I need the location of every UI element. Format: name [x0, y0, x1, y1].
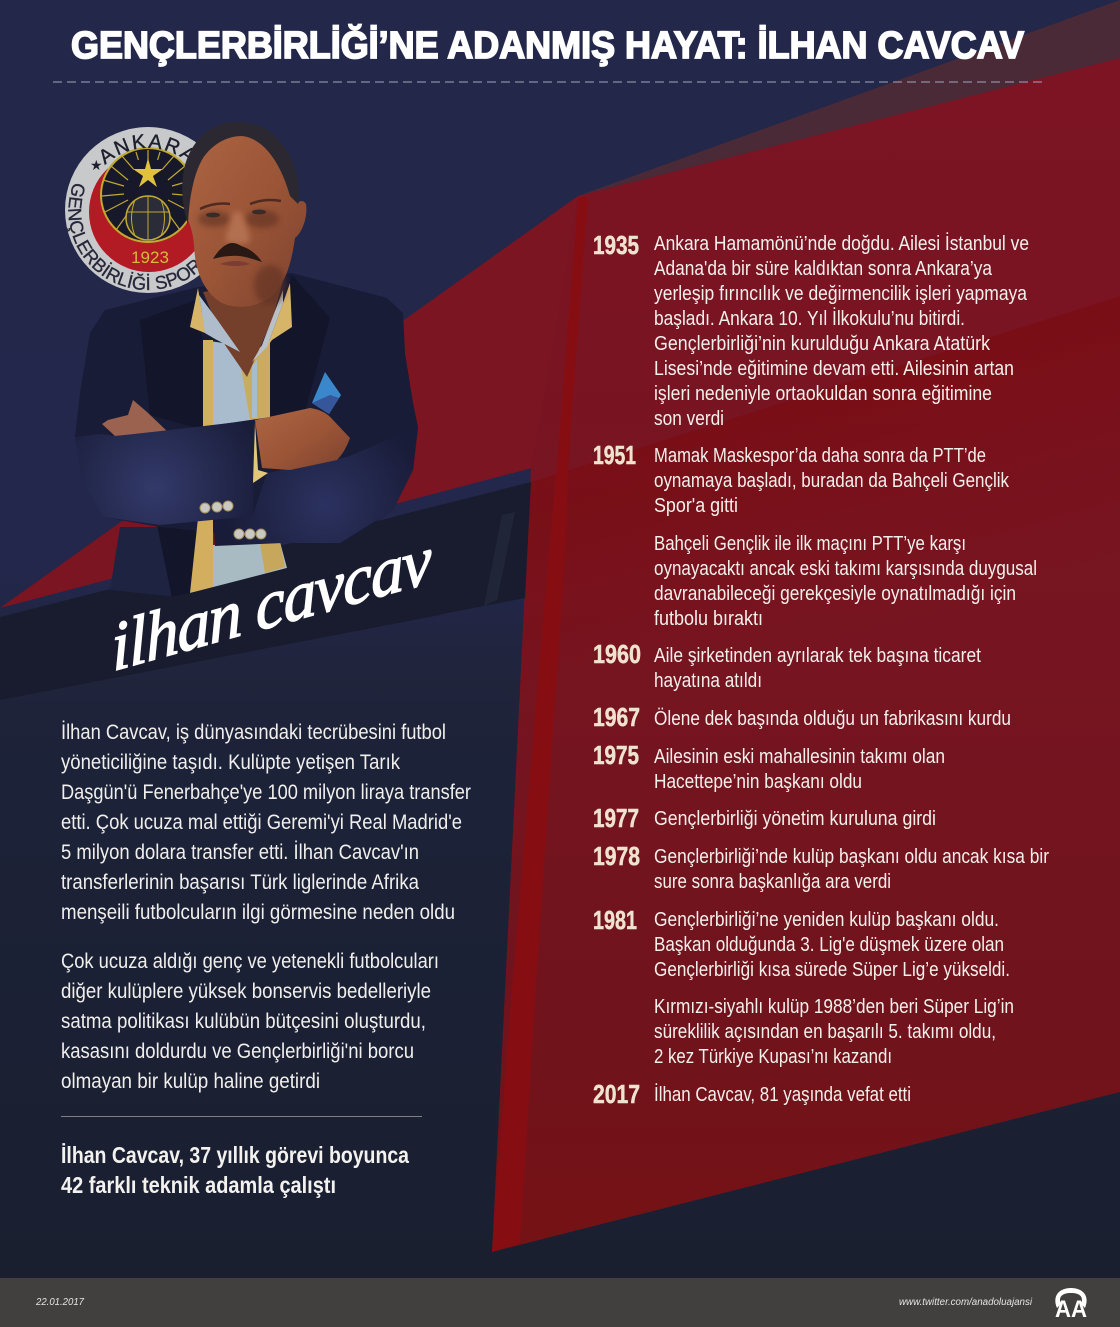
timeline: 1935: yerleşip fırıncılık ve değirmencilik işleri yapmaya: [654, 282, 1028, 305]
club badge: ★: [90, 158, 103, 174]
timeline: 1951: Spor'a gitti: [654, 494, 738, 517]
timeline: 1978: Gençlerbirliği’nde kulüp başkanı oldu ancak kısa bir: [654, 845, 1049, 868]
left text: paragraph 1: etti. Çok ucuza mal ettiği Geremi'yi Real Madrid'e: [61, 810, 462, 834]
timeline: 1960: Aile şirketinden ayrılarak tek başına ticaret: [654, 644, 981, 667]
timeline: 1951: davranabileceği gerekçesiyle oynatılmadığı için: [654, 582, 1016, 605]
timeline: 1951: Bahçeli Gençlik ile ilk maçını PTT’ye karşı: [654, 532, 966, 555]
neck: [203, 280, 283, 377]
left text: paragraph 2: diğer kulüplere yüksek bonservis bedelleriyle: [61, 979, 431, 1003]
portrait: İlhan Cavcav: [75, 122, 418, 598]
red triangle: [0, 196, 578, 608]
left hand: [102, 400, 169, 436]
left text: paragraph 1: menşeili futbolcuların ilgi görmesine neden oldu: [61, 900, 455, 924]
timeline: 1951: futbolu bıraktı: [654, 607, 763, 630]
forearm sleeve: [75, 420, 255, 525]
lips: [220, 261, 250, 266]
left text: paragraph 2: satma politikası kulübün bütçesini oluşturdu,: [61, 1009, 426, 1033]
name band: [0, 482, 531, 700]
title: GENÇLERBİRLİĞİ’NE ADANMIŞ HAYAT: İLHAN CAVCAV: [71, 23, 1025, 67]
timeline: 1981: 1981: [593, 905, 637, 935]
left text: highlight: [61, 1142, 409, 1198]
dashed divider: [53, 81, 1043, 83]
timeline: 2017: [593, 1079, 911, 1109]
timeline: 1935: Lisesi’nde eğitimine devam etti. Ailesinin artan: [654, 357, 1014, 380]
shirt: [203, 340, 270, 427]
club badge: ANKARA: [101, 134, 192, 166]
timeline: 1951: 1951: [593, 440, 636, 470]
main red panel: [492, 58, 1120, 1252]
timeline: 1975: Ailesinin eski mahallesinin takımı olan: [654, 745, 945, 768]
timeline: 1975: 1975: [593, 740, 639, 770]
icon: AA logo: AA: [1055, 1296, 1087, 1323]
lower jacket: [157, 525, 200, 598]
left text: paragraph 2: kasasını doldurdu ve Gençlerbirliği'ni borcu: [61, 1039, 414, 1063]
moustache: [213, 243, 262, 262]
left text: paragraph 1: Daşgün'ü Fenerbahçe'ye 100 milyon liraya transfer: [61, 780, 471, 804]
nose highlight: [226, 212, 250, 244]
shirt collars: [190, 283, 292, 362]
pocket square: [312, 372, 341, 414]
timeline: 1981: Gençlerbirliği kısa sürede Süper Lig’e yükseldi.: [654, 958, 1010, 981]
timeline: 1935: Adana'da bir süre kaldıktan sonra Ankara’ya: [654, 257, 992, 280]
timeline: 1935: işleri nedeniyle ortaokuldan sonra eğitimine: [654, 382, 992, 405]
timeline: 1960: hayatına atıldı: [654, 669, 762, 692]
footer bar: [0, 1278, 1120, 1327]
timeline: 1935: son verdi: [654, 407, 724, 430]
lower body fade: [110, 527, 178, 597]
left text: paragraph 1: [61, 720, 471, 924]
timeline: 1935: Ankara Hamamönü’nde doğdu. Ailesi İstanbul ve: [654, 232, 1029, 255]
club badge: 1923: [131, 248, 169, 267]
buttons upper: [200, 501, 233, 513]
timeline: 1978: 1978: [593, 841, 640, 871]
timeline: 1977: 1977: [593, 803, 639, 833]
timeline: 2017: İlhan Cavcav, 81 yaşında vefat etti: [654, 1083, 911, 1106]
left text: paragraph 1: yöneticiliğine taşıdı. Kulüpte yetişen Tarık: [61, 750, 400, 774]
left text: paragraph 1: transferlerinin başarısı Türk liglerinde Afrika: [61, 870, 419, 894]
timeline: 1981: [593, 905, 1014, 1068]
timeline: 1967: [593, 702, 1011, 732]
translucent ray: [578, 0, 1120, 196]
timeline: 1951: oynamaya başladı, buradan da Bahçeli Gençlik: [654, 469, 1010, 492]
left text: paragraph 2: olmayan bir kulüp haline getirdi: [61, 1069, 320, 1093]
script name: ilhan cavcav: [109, 520, 434, 686]
timeline: 1978: sure sonra başkanlığa ara verdi: [654, 870, 891, 893]
left text: highlight: 42 farklı teknik adamla çalıştı: [61, 1172, 336, 1198]
left text: paragraph 1: İlhan Cavcav, iş dünyasındaki tecrübesini futbol: [61, 720, 446, 744]
eyes: [206, 210, 266, 217]
timeline: 1981: Gençlerbirliği’ne yeniden kulüp başkanı oldu.: [654, 908, 999, 931]
brows: [200, 200, 281, 209]
head: [182, 122, 306, 307]
timeline: 1981: Başkan olduğunda 3. Lig'e düşmek üzere olan: [654, 933, 1004, 956]
timeline: 1967: Ölene dek başında olduğu un fabrikasını kurdu: [654, 707, 1011, 730]
timeline: 2017: 2017: [593, 1079, 640, 1109]
timeline: 1978: [593, 841, 1049, 893]
timeline: 1977: [593, 803, 936, 833]
separator: [61, 1116, 422, 1118]
timeline: 1981: 2 kez Türkiye Kupası’nı kazandı: [654, 1045, 892, 1068]
timeline: 1951: [593, 440, 1037, 630]
band overlay under portrait: [100, 505, 440, 678]
timeline: 1960: [593, 639, 981, 692]
footer date: 22.01.2017: [35, 1297, 84, 1308]
timeline: 1951: oynayacaktı ancak eski takımı karşısında duygusal: [654, 557, 1037, 580]
lower shirt: [190, 518, 287, 593]
shirt cuff: [253, 422, 268, 483]
left text: paragraph 2: [61, 949, 439, 1093]
timeline: 1935: [593, 230, 1029, 430]
left text: highlight: İlhan Cavcav, 37 yıllık görevi boyunca: [61, 1142, 409, 1168]
jacket: [75, 273, 418, 545]
timeline: 1975: [593, 740, 945, 793]
timeline: 1981: süreklilik açısından en başarılı 5. takımı oldu,: [654, 1020, 996, 1043]
right hand: [255, 408, 350, 470]
footer url: www.twitter.com/anadoluajansi: [899, 1297, 1033, 1308]
timeline: 1960: 1960: [593, 639, 641, 669]
timeline: 1967: 1967: [593, 702, 640, 732]
timeline: 1935: başladı. Ankara 10. Yıl İlkokulu’nu bitirdi.: [654, 307, 965, 330]
timeline: 1977: Gençlerbirliği yönetim kuruluna girdi: [654, 807, 936, 830]
left text: paragraph 1: 5 milyon dolara transfer etti. İlhan Cavcav'ın: [61, 840, 419, 864]
left text: paragraph 2: Çok ucuza aldığı genç ve yetenekli futbolcuları: [61, 949, 439, 973]
buttons lower: [234, 529, 266, 539]
lower sleeve: [213, 427, 418, 546]
timeline: 1951: Mamak Maskespor’da daha sonra da PTT’de: [654, 444, 986, 467]
timeline: 1981: Kırmızı-siyahlı kulüp 1988’den beri Süper Lig’in: [654, 995, 1014, 1018]
timeline: 1935: Gençlerbirliği’nin kurulduğu Ankara Atatürk: [654, 332, 991, 355]
club badge: GENÇLERBİRLİĞİ SPOR: [66, 184, 198, 290]
lapels: [140, 275, 330, 430]
club badge: [65, 127, 200, 293]
timeline: 1935: 1935: [593, 230, 639, 260]
timeline: 1975: Hacettepe’nin başkanı oldu: [654, 770, 862, 793]
